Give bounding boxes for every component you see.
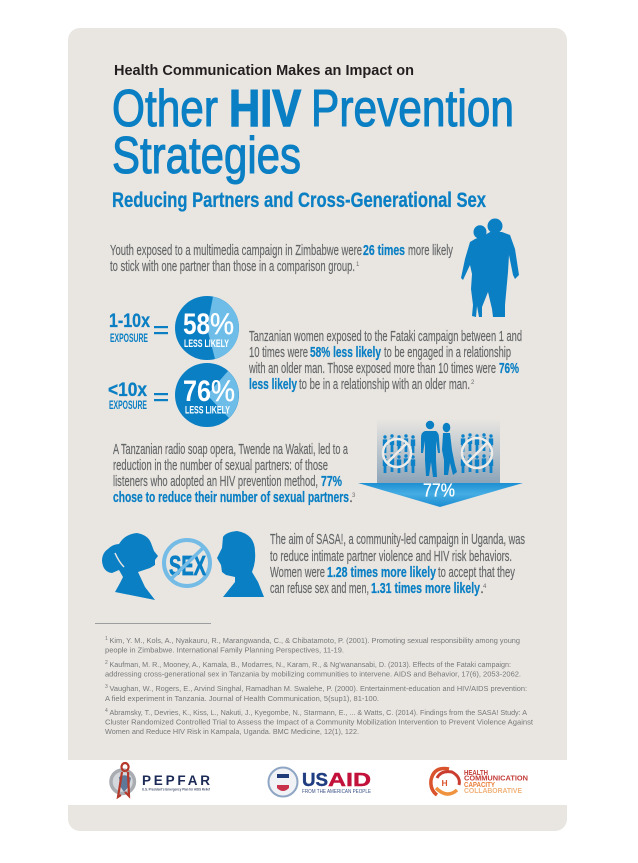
logo: Health Communication Capacity Collaborative: H	[442, 778, 448, 788]
reference 3: A field experiment in Tanzania. Journal of Health Communication, 5(sup1), 81-100.	[105, 694, 379, 703]
logo: PEPFAR: PEPFAR	[142, 773, 210, 788]
text: radio soap opera: reduction in the number of sexual partners: of those	[113, 458, 328, 474]
main title: Prevention	[311, 80, 514, 138]
text: Fataki campaign: to be engaged in a relationship	[384, 345, 511, 361]
text: SASA campaign: Women were	[270, 565, 325, 581]
heading block	[112, 63, 514, 212]
logo: Health Communication Capacity Collaborative: COLLABORATIVE	[464, 786, 522, 795]
reference 2: Kaufman, M. R., Mooney, A., Kamala, B., Modarres, N., Karam, R., & Ng'wanansabi, D. (2013). Effects of the Fataki campaign:	[110, 660, 511, 669]
text: Fataki campaign: 76%	[499, 361, 519, 377]
text: Fataki campaign	[248, 329, 522, 393]
pie chart: 58%	[175, 296, 239, 360]
exposure row: 1-10x	[109, 296, 239, 360]
crowd right	[461, 433, 493, 473]
gradient backdrop	[377, 419, 500, 484]
icon: couple silhouette	[461, 218, 519, 317]
reference 1	[105, 636, 520, 654]
crowd left	[383, 434, 415, 473]
text: Zimbabwe campaign: to stick with one partner than those in a comparison group.	[110, 259, 355, 275]
background panel	[68, 28, 567, 831]
label: <10x exposure: <10x	[108, 380, 147, 401]
reference 3	[105, 684, 527, 703]
exposure row: <10x	[108, 363, 239, 427]
main title: Other	[112, 80, 218, 138]
subtitle: Reducing Partners and Cross-Generational Sex	[112, 189, 486, 212]
text: radio soap opera: A Tanzanian radio soap opera, Twende na Wakati, led to a	[113, 442, 349, 458]
text: Fataki campaign: to be in a relationship with an older man.	[299, 377, 470, 393]
text: Fataki campaign: 10 times were	[249, 345, 308, 361]
graphic: 77% reduction arrow	[358, 419, 523, 507]
text: Fataki campaign: 58% less likely	[310, 345, 381, 361]
text: SASA campaign	[270, 532, 525, 597]
logo: Health Communication Capacity Collaborative: COMMUNICATION	[464, 774, 528, 782]
text: SASA campaign: to reduce intimate partner violence and HIV risk behaviors.	[270, 549, 512, 565]
label: 1-10x exposure: 1-10x	[109, 311, 150, 332]
text: SASA campaign: 1.28 times more likely	[327, 565, 436, 581]
reference 4: Abramsky, T., Devries, K., Kiss, L., Nakuti, J., Kyegombe, N., Starmann, E., ... & Watts, C. (2014). Findings from the SASA! Study: A	[110, 708, 528, 717]
logo: PEPFAR: U.S. President's Emergency Plan for AIDS Relief	[142, 788, 211, 792]
man profile	[217, 531, 264, 597]
text: radio soap opera: listeners who adopted an HIV prevention method,	[113, 474, 318, 490]
pie chart: 76%: 76	[183, 375, 211, 408]
ponytail highlight	[115, 553, 124, 567]
logo: Health Communication Capacity Collaborative: HEALTH	[464, 768, 488, 777]
pie chart: 76%: %	[211, 375, 235, 408]
text: Zimbabwe campaign: more likely	[408, 243, 453, 259]
label: 1-10x exposure	[109, 311, 168, 345]
logo: USAID	[268, 768, 371, 796]
pie chart: 76%: LESS LIKELY	[185, 404, 230, 416]
text: SASA campaign: 4	[483, 584, 487, 590]
woman profile	[102, 533, 158, 600]
references	[105, 636, 534, 736]
text: radio soap opera: 3	[352, 493, 356, 499]
logo: USAID: US	[302, 770, 328, 790]
reference 2	[105, 660, 521, 678]
main title: Strategies	[112, 127, 301, 185]
label: 1-10x exposure: EXPOSURE	[110, 333, 148, 345]
logo: USAID: AID	[328, 770, 371, 790]
reference 3: Vaughan, W., Rogers, E., Arvind Singhal, Ramadhan M. Swalehe, P. (2000). Entertainment-education and HIV/AIDS prevention:	[110, 684, 527, 693]
pie chart: 58%: %	[210, 308, 234, 341]
label: <10x exposure	[108, 380, 168, 412]
main title	[112, 80, 514, 185]
main title: HIV	[229, 80, 301, 138]
reference 4: Cluster Randomized Controlled Trial to Assess the Impact of a Community Mobilization Intervention to Prevent Violence Against	[105, 718, 534, 726]
text: SASA campaign: .	[480, 581, 484, 597]
reference 4	[105, 708, 534, 736]
text: SASA campaign: can refuse sex and men,	[270, 581, 369, 597]
text: Zimbabwe campaign: 26 times	[363, 243, 405, 259]
pie chart: 58%: LESS LIKELY	[184, 338, 229, 350]
central couple	[421, 421, 457, 477]
kicker heading: Health Communication Makes an Impact on	[114, 63, 414, 79]
label: <10x exposure: EXPOSURE	[109, 400, 147, 412]
logo band	[68, 760, 567, 805]
text: radio soap opera	[113, 442, 356, 506]
reference 2: 2	[105, 660, 108, 666]
reference 1: people in Zimbabwe. International Family Planning Perspectives, 11-19.	[105, 646, 344, 654]
text: Zimbabwe campaign: 1	[356, 262, 360, 268]
reference 1: 1	[105, 636, 108, 642]
no-sex symbol: SEX	[169, 550, 206, 581]
arrow	[358, 483, 523, 507]
no-sex symbol	[164, 540, 210, 586]
reference 1: Kim, Y. M., Kols, A., Nyakauru, R., Marangwanda, C., & Chibatamoto, P. (2001). Promoting sexual responsibility among young	[110, 636, 520, 645]
text: Fataki campaign: less likely	[249, 377, 297, 393]
text: SASA campaign: to accept that they	[438, 565, 515, 581]
77% label: 77%	[423, 480, 455, 500]
text: radio soap opera: chose to reduce their number of sexual partners	[113, 490, 349, 506]
logo: PEPFAR	[109, 763, 211, 797]
text: radio soap opera: .	[349, 490, 353, 506]
text: Zimbabwe campaign: Youth exposed to a multimedia campaign in Zimbabwe were	[110, 243, 362, 259]
logo: Health Communication Capacity Collaborative: CAPACITY	[464, 780, 495, 789]
pie chart: 76%	[175, 363, 239, 427]
logo: Health Communication Capacity Collaborative	[431, 768, 528, 795]
icon: woman and man with no-sex symbol	[102, 531, 264, 600]
reference 4: Women and Reduce HIV Risk in Kampala, Uganda. BMC Medicine, 12(1), 122.	[105, 727, 359, 736]
text: Fataki campaign: 2	[471, 380, 475, 386]
text: Fataki campaign: with an older man. Those exposed more than 10 times were	[248, 361, 496, 377]
text: Zimbabwe campaign	[110, 243, 453, 275]
reference 4: 4	[105, 708, 108, 714]
pie chart: 58%: 58	[183, 308, 210, 341]
no symbol right	[462, 438, 492, 468]
text: SASA campaign: 1.31 times more likely	[371, 581, 480, 597]
logo: USAID: FROM THE AMERICAN PEOPLE	[302, 789, 371, 795]
reference 2: addressing cross-generational sex in Tanzania by mobilizing communities to intervene. AIDS and Behavior, 17(6), 2053-2062.	[105, 670, 521, 678]
no symbol left	[383, 439, 411, 467]
text: radio soap opera: 77%	[321, 474, 342, 490]
reference 3: 3	[105, 684, 108, 690]
